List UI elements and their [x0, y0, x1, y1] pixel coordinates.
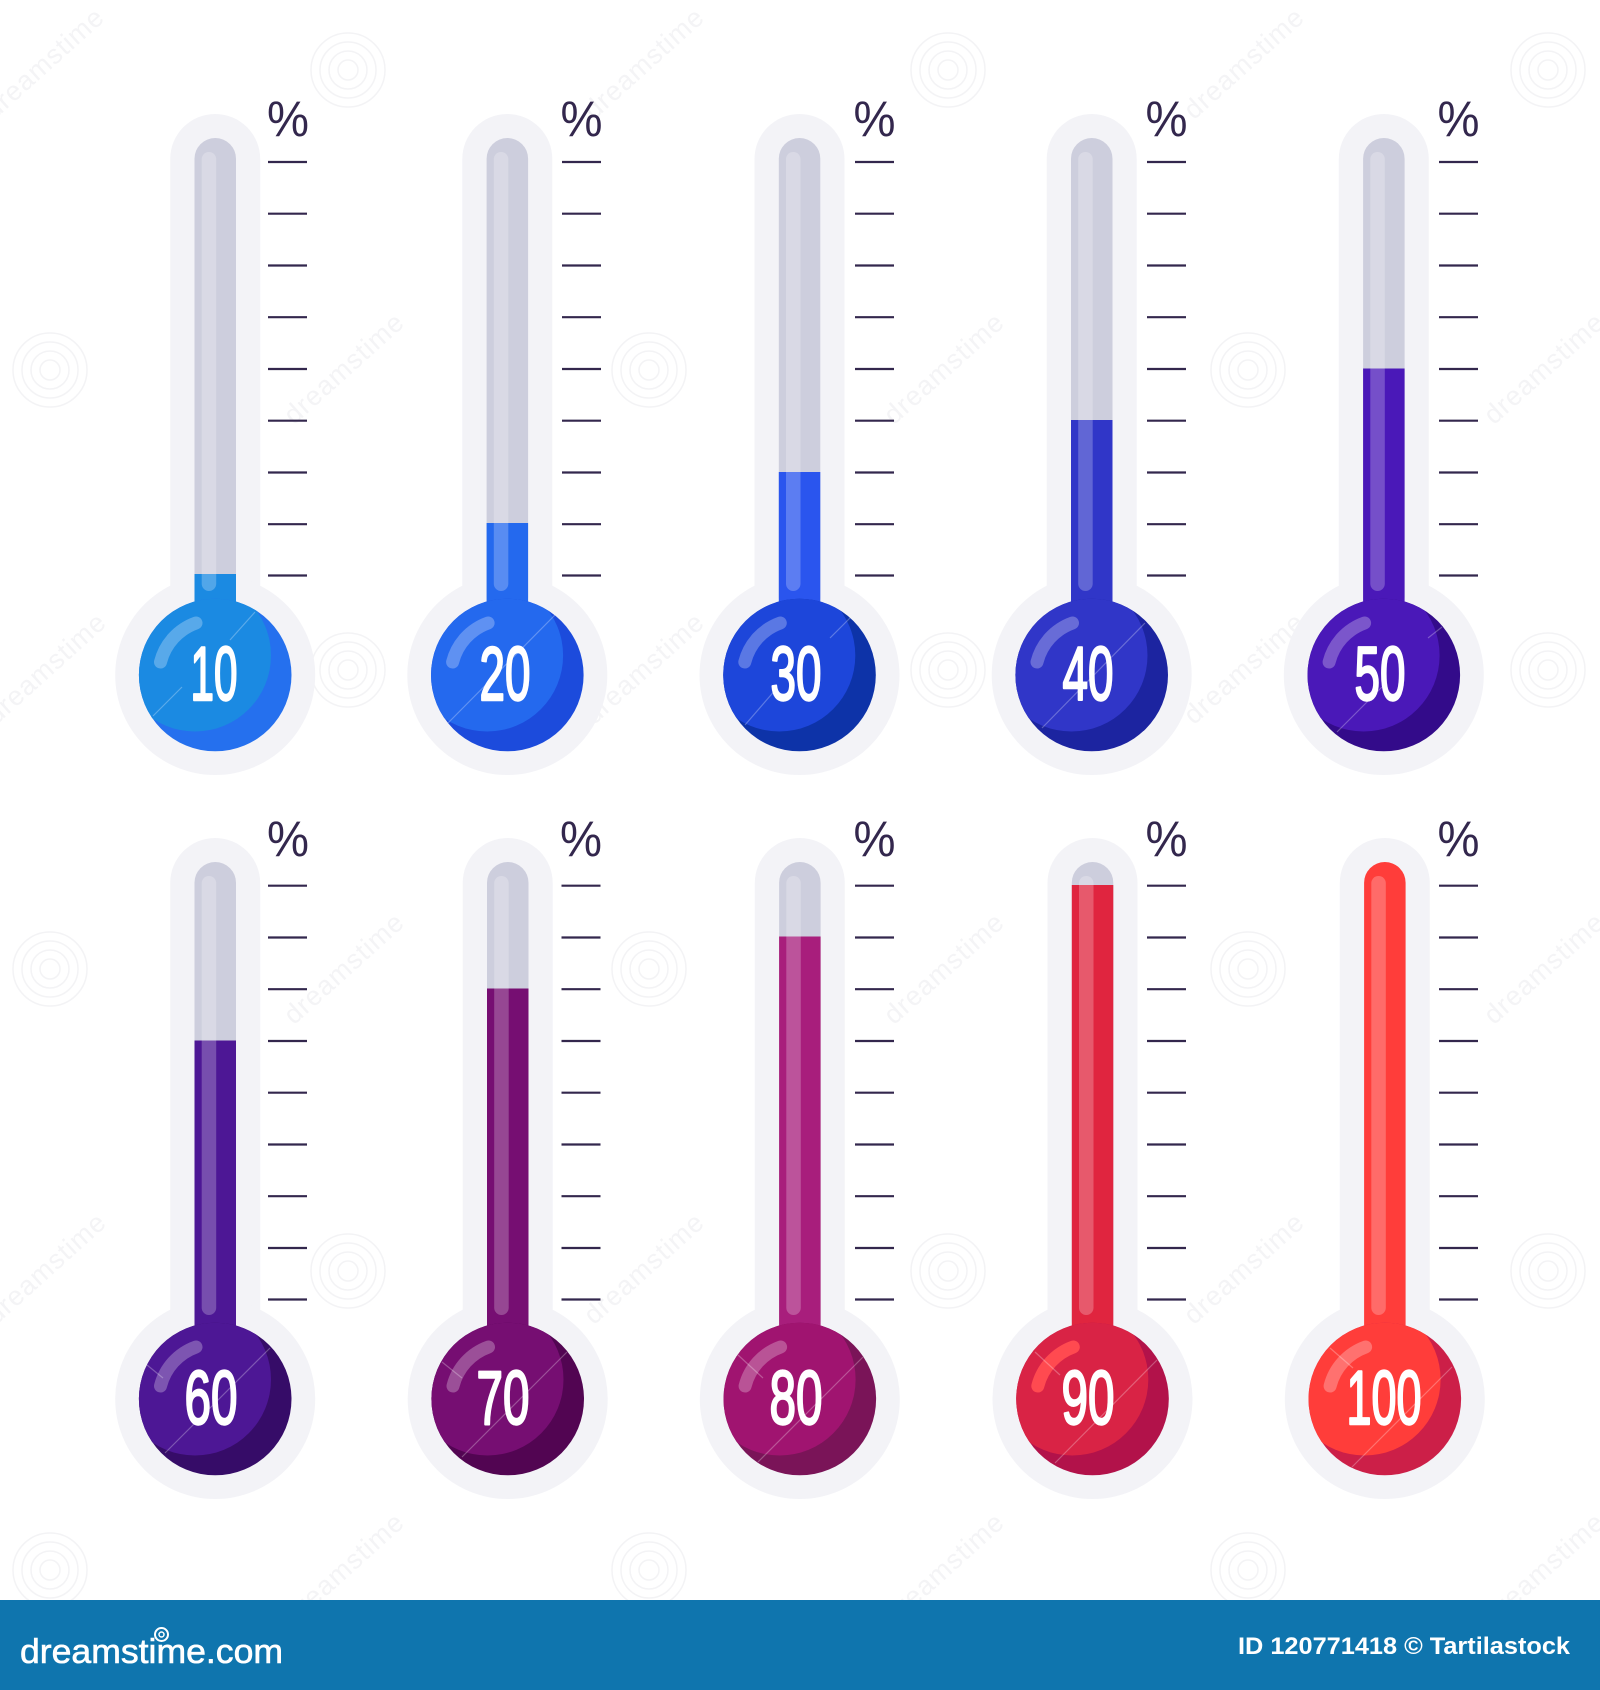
- thermometer: 90 percent: [992, 811, 1192, 1499]
- thermometer: 40 percent: %: [1146, 91, 1188, 147]
- thermometer: 20 percent: 20: [480, 632, 530, 717]
- thermometer: 80 percent: [700, 811, 900, 1499]
- thermometer: 10 percent: 10: [190, 632, 238, 717]
- thermometer: 50 percent: [1284, 91, 1484, 775]
- watermark pattern: dreamstime: [578, 607, 710, 730]
- watermark pattern: dreamstime: [878, 1507, 1010, 1630]
- thermometer: 70 percent: 70: [476, 1356, 530, 1441]
- thermometer: 100 percent: %: [1438, 811, 1480, 867]
- thermometer: 50 percent: 50: [1354, 632, 1406, 717]
- thermometer: 20 percent: [407, 91, 607, 775]
- watermark pattern: dreamstime: [1178, 607, 1310, 730]
- watermark pattern: dreamstime: [1178, 2, 1310, 125]
- thermometer: 80 percent: %: [854, 811, 896, 867]
- footer logo: dreamstime.com: dreamstime.com: [20, 1633, 283, 1671]
- thermometer: 100 percent: [1285, 811, 1485, 1499]
- thermometer: 30 percent: %: [854, 91, 896, 147]
- thermometer: 100 percent: 100: [1346, 1356, 1422, 1441]
- watermark pattern: dreamstime: [578, 2, 710, 125]
- watermark pattern: dreamstime: [278, 307, 410, 430]
- thermometer: 30 percent: 30: [770, 632, 822, 717]
- footer bar: [0, 1600, 1600, 1690]
- thermometer: 70 percent: %: [560, 811, 602, 867]
- thermometer: 60 percent: %: [267, 811, 309, 867]
- thermometer: 90 percent: 90: [1062, 1356, 1114, 1441]
- thermometer: 40 percent: 40: [1062, 632, 1114, 717]
- thermometer: 10 percent: %: [267, 91, 309, 147]
- thermometer: 80 percent: 80: [770, 1356, 822, 1441]
- watermark pattern: dreamstime: [878, 307, 1010, 430]
- watermark pattern: dreamstime: [878, 907, 1010, 1030]
- watermark pattern: dreamstime: [278, 1507, 410, 1630]
- thermometer: 90 percent: %: [1146, 811, 1188, 867]
- watermark pattern: dreamstime: [1178, 1207, 1310, 1330]
- thermometer: 40 percent: [992, 91, 1192, 775]
- watermark pattern: dreamstime: [278, 907, 410, 1030]
- thermometer: 50 percent: %: [1438, 91, 1480, 147]
- thermometer: 20 percent: %: [560, 91, 602, 147]
- footer credit: image id: ID 120771418 © Tartilastock: [1238, 1633, 1571, 1660]
- thermometer: 60 percent: 60: [184, 1356, 238, 1441]
- thermometer: 60 percent: [115, 811, 315, 1499]
- watermark pattern: dreamstime: [578, 1207, 710, 1330]
- thermometer: 70 percent: [408, 811, 608, 1499]
- thermometer: 10 percent: [115, 91, 315, 775]
- thermometer: 30 percent: [700, 91, 900, 775]
